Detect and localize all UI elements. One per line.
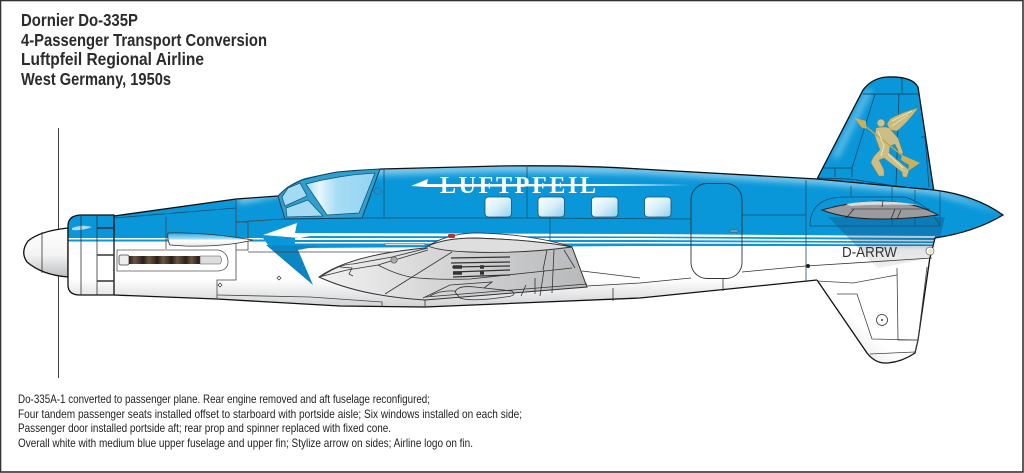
nose blue stripe	[60, 240, 265, 242]
icon: fin roundel	[876, 314, 888, 326]
nose panel lines	[114, 199, 430, 306]
fuselage body	[60, 160, 1010, 308]
icon: winged archer fin logo	[855, 108, 920, 177]
tail navigation light	[926, 247, 934, 255]
title: Luftpfeil Regional Airline	[21, 49, 204, 69]
cabin windows	[485, 197, 671, 217]
wing pitot knob	[391, 257, 397, 263]
cabin panel lines	[362, 167, 806, 281]
upper fin	[817, 77, 934, 192]
title: West Germany, 1950s	[21, 69, 171, 89]
spinner nose cone	[24, 228, 68, 277]
propeller datum line	[58, 128, 60, 378]
aircraft	[24, 77, 1010, 363]
registration: D-ARRW	[842, 244, 898, 261]
description text: Overall white with medium blue upper fuselage and upper fin; Stylize arrow on sides; Airline logo on fin.	[18, 436, 473, 450]
main glass	[306, 173, 375, 215]
engine cowling	[42, 215, 114, 295]
tail air scoop	[810, 186, 940, 226]
lower fin	[806, 257, 930, 363]
wing top band	[425, 233, 572, 248]
white underside	[68, 238, 930, 306]
exhaust panel	[117, 250, 228, 271]
logotype: LUFTPFEIL	[411, 173, 690, 199]
canopy	[278, 169, 380, 219]
top highlight	[236, 162, 1003, 213]
fuselage outline	[114, 166, 1003, 307]
wing vent slots	[451, 257, 510, 277]
cheatline stripes	[295, 233, 935, 244]
description text: Do-335A-1 converted to passenger plane. Rear engine removed and aft fuselage reconfigured;	[18, 392, 430, 406]
small fuselage markers	[218, 276, 281, 287]
title: Dornier Do-335P	[21, 10, 138, 30]
wing	[319, 233, 587, 300]
cabin hatch mark	[374, 188, 382, 194]
description text: Four tandem passenger seats installed offset to starboard with portside aisle; Six windows installed on each side;	[18, 407, 522, 421]
wing-root fairing	[168, 233, 253, 246]
blue upper fuselage	[60, 160, 1010, 248]
front upper pane	[282, 183, 307, 206]
tail shadow	[828, 217, 945, 268]
title	[21, 10, 267, 89]
arrow marking	[263, 223, 320, 285]
logotype: LUFTPFEIL: LUFTPFEIL	[440, 173, 596, 199]
rear wing root line	[425, 258, 932, 307]
passenger door	[691, 184, 742, 278]
title: 4-Passenger Transport Conversion	[21, 30, 267, 50]
description text: Passenger door installed portside aft; rear prop and spinner replaced with fixed cone.	[18, 421, 391, 435]
gun barrel	[385, 244, 425, 246]
description text	[18, 392, 522, 450]
front lower pane	[286, 200, 323, 217]
